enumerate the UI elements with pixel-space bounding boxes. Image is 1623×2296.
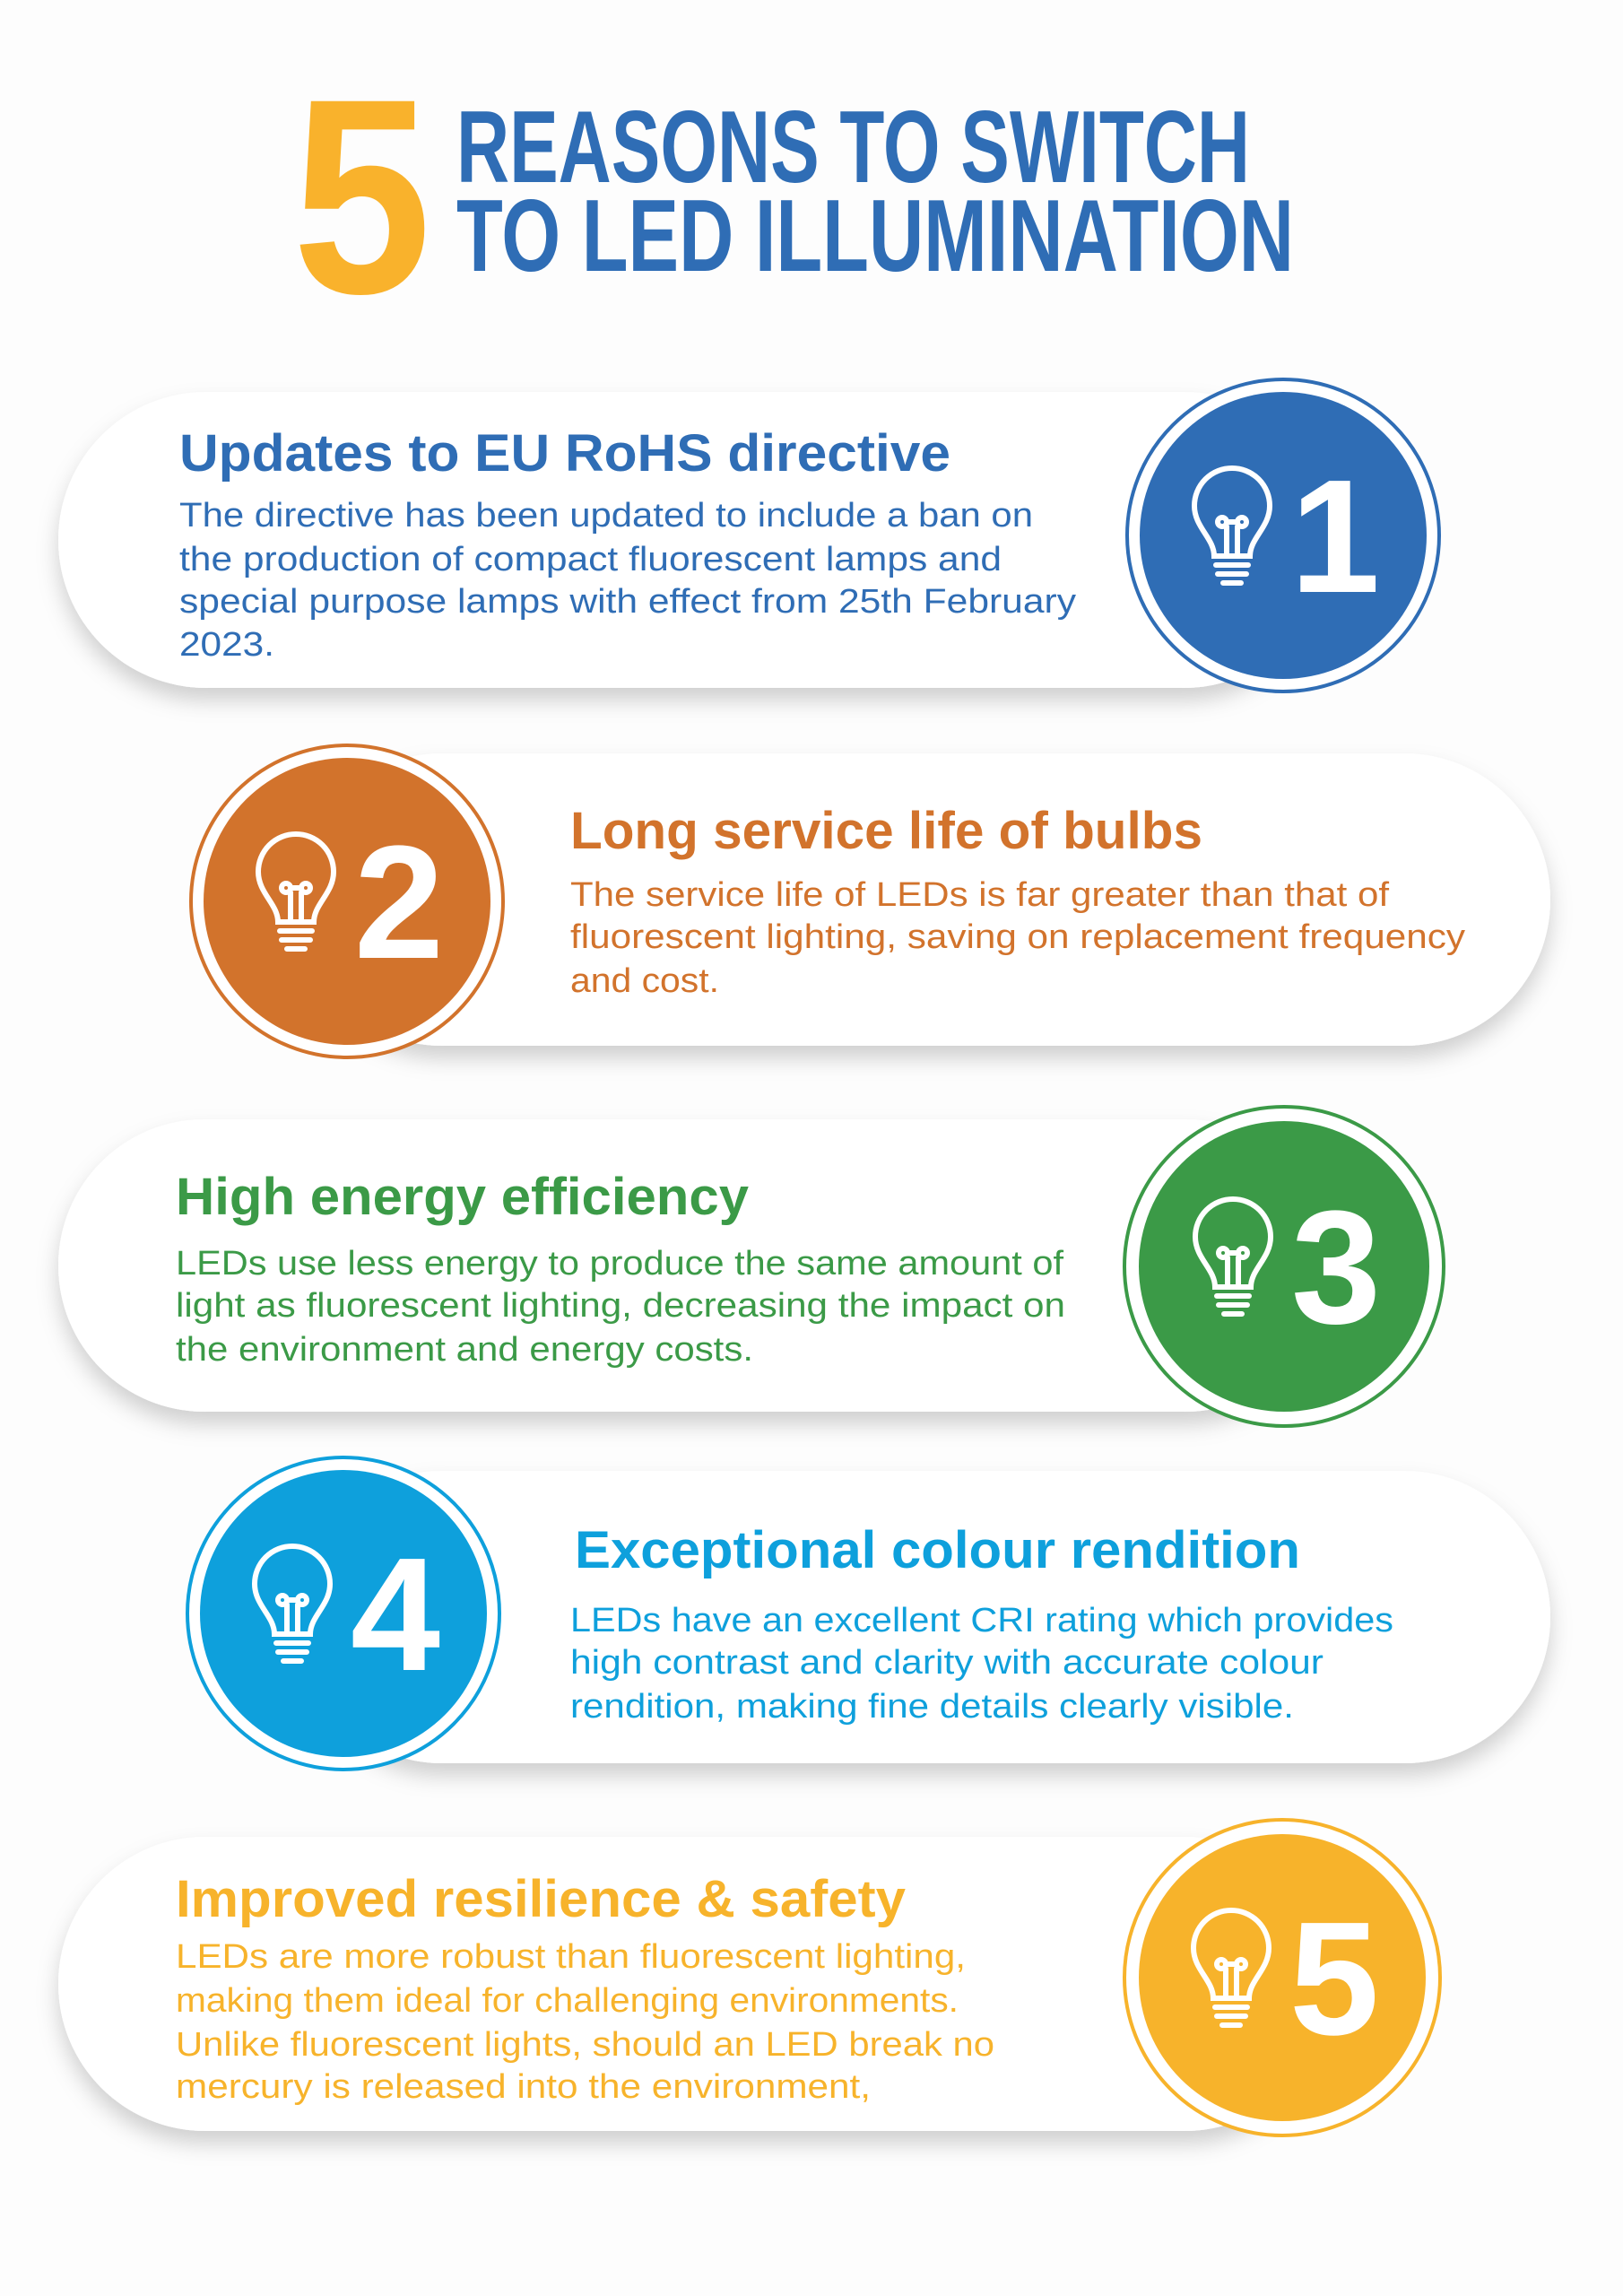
title: TO LED ILLUMINATION [456,179,1294,293]
body 4: LEDs have an excellent CRI rating which provides [570,1602,1393,1639]
body 5 [176,1938,994,2106]
icon: badge 1: 1 [1290,447,1380,627]
body 5: mercury is released into the environment, [176,2068,871,2106]
icon: badge 3 [1124,1107,1444,1426]
body 2: The service life of LEDs is far greater than that of [570,876,1389,914]
heading 3: High energy efficiency [176,1168,749,1226]
title [292,40,1294,352]
heading 1: Updates to EU RoHS directive [179,424,950,483]
body 1: 2023. [179,626,274,664]
heading 5: Improved resilience & safety [176,1870,906,1928]
body 3: LEDs use less energy to produce the same amount of [176,1245,1063,1283]
body 5: Unlike fluorescent lights, should an LED break no [176,2026,994,2064]
body 1: special purpose lamps with effect from 25th February [179,583,1076,621]
icon: badge 5: 5 [1289,1889,1379,2069]
icon: badge 3: 3 [1291,1178,1381,1358]
body 1 [179,497,1076,664]
body 2: and cost. [570,962,719,1000]
body 3: light as fluorescent lighting, decreasing the impact on [176,1287,1065,1325]
body 5: making them ideal for challenging environments. [176,1982,959,2020]
icon: badge 4 [187,1457,499,1770]
title: 5 [292,40,431,352]
heading 2: Long service life of bulbs [570,802,1202,860]
body 3: the environment and energy costs. [176,1331,753,1369]
body 5: LEDs are more robust than fluorescent lighting, [176,1938,966,1976]
body 1: The directive has been updated to include a ban on [179,497,1033,535]
panel: reason 1 [58,379,1439,691]
body 4: high contrast and clarity with accurate colour [570,1644,1324,1682]
icon: badge 4: 4 [351,1525,440,1705]
body 2 [570,876,1465,1000]
title: REASONS TO SWITCH [456,91,1250,204]
body 4: rendition, making fine details clearly visible. [570,1688,1294,1726]
body 1: the production of compact fluorescent lamps and [179,541,1002,578]
body 4 [570,1602,1393,1726]
icon: badge 5 [1124,1820,1440,2135]
body 3 [176,1245,1065,1369]
heading 4: Exceptional colour rendition [575,1521,1300,1579]
panel: reason 3 [58,1107,1444,1426]
panel: reason 5 [58,1820,1440,2135]
panel: reason 4 [187,1457,1550,1770]
icon: badge 2: 2 [354,813,444,993]
panel: reason 2 [191,745,1550,1057]
body 2: fluorescent lighting, saving on replacement frequency [570,918,1465,956]
icon: badge 2 [191,745,503,1057]
icon: badge 1 [1127,379,1439,691]
